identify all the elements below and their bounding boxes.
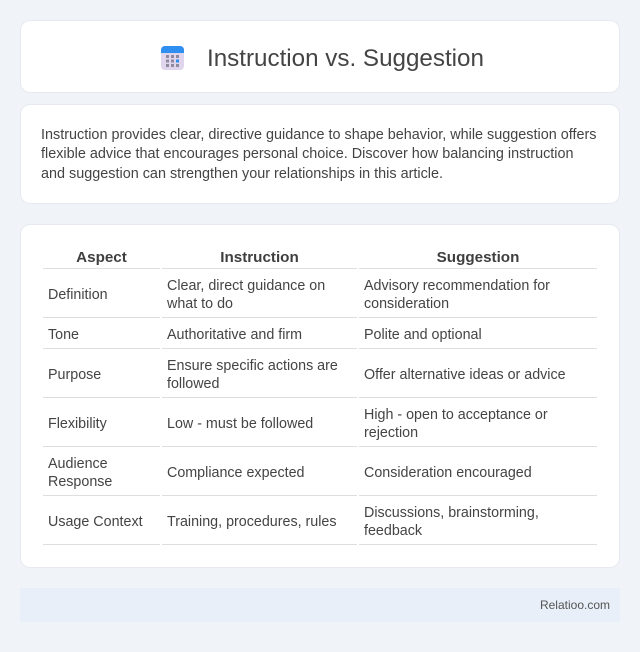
row: tone: Polite and optional: [364, 327, 482, 343]
row: audience response: Consideration encouraged: [364, 465, 532, 481]
row: purpose: Offer alternative ideas or advice: [364, 367, 566, 383]
row: audience response: Response: [48, 474, 112, 490]
row: flexibility: [48, 407, 548, 441]
table header: Instruction: [220, 249, 299, 266]
footer bar: [20, 588, 620, 622]
row: usage context: Training, procedures, rules: [167, 514, 337, 530]
row: purpose: Purpose: [48, 367, 101, 383]
row: purpose: followed: [167, 376, 219, 392]
row: flexibility: High - open to acceptance or: [364, 407, 548, 423]
panel: comparison table: [20, 224, 620, 568]
intro text: flexible advice that encourages personal choice. Discover how balancing instruction: [41, 146, 574, 162]
row: usage context: Discussions, brainstorming,: [364, 505, 539, 521]
table header: [76, 249, 519, 266]
table header: Suggestion: [437, 249, 519, 266]
row: usage context: Usage Context: [48, 514, 143, 530]
table header: Aspect: [76, 249, 127, 266]
row: flexibility: Flexibility: [48, 416, 107, 432]
row: definition: consideration: [364, 296, 449, 312]
row: purpose: Ensure specific actions are: [167, 358, 338, 374]
title: Instruction vs. Suggestion: [207, 45, 484, 72]
row: tone: Authoritative and firm: [167, 327, 302, 343]
panel: introduction: [20, 104, 620, 204]
row: tone: [48, 327, 482, 343]
row: audience response: [48, 456, 532, 490]
intro text: and suggestion can strengthen your relationships in this article.: [41, 166, 443, 182]
panel: title card: [20, 20, 620, 93]
row: usage context: [48, 505, 539, 539]
row: definition: what to do: [167, 296, 233, 312]
row: audience response: Compliance expected: [167, 465, 304, 481]
intro text: Instruction provides clear, directive guidance to shape behavior, while suggestion offers: [41, 126, 597, 142]
row: definition: Definition: [48, 287, 108, 303]
row: usage context: feedback: [364, 523, 422, 539]
row: flexibility: rejection: [364, 425, 418, 441]
row: tone: Tone: [48, 327, 79, 343]
row: purpose: [48, 358, 566, 392]
row: flexibility: Low - must be followed: [167, 416, 313, 432]
row: definition: [48, 278, 550, 312]
row: definition: Clear, direct guidance on: [167, 278, 325, 294]
row: definition: Advisory recommendation for: [364, 278, 550, 294]
icon: calendar: [161, 46, 184, 70]
intro text: [41, 126, 597, 182]
row: audience response: Audience: [48, 456, 108, 472]
footer credit: Relatioo.com: [540, 598, 610, 612]
